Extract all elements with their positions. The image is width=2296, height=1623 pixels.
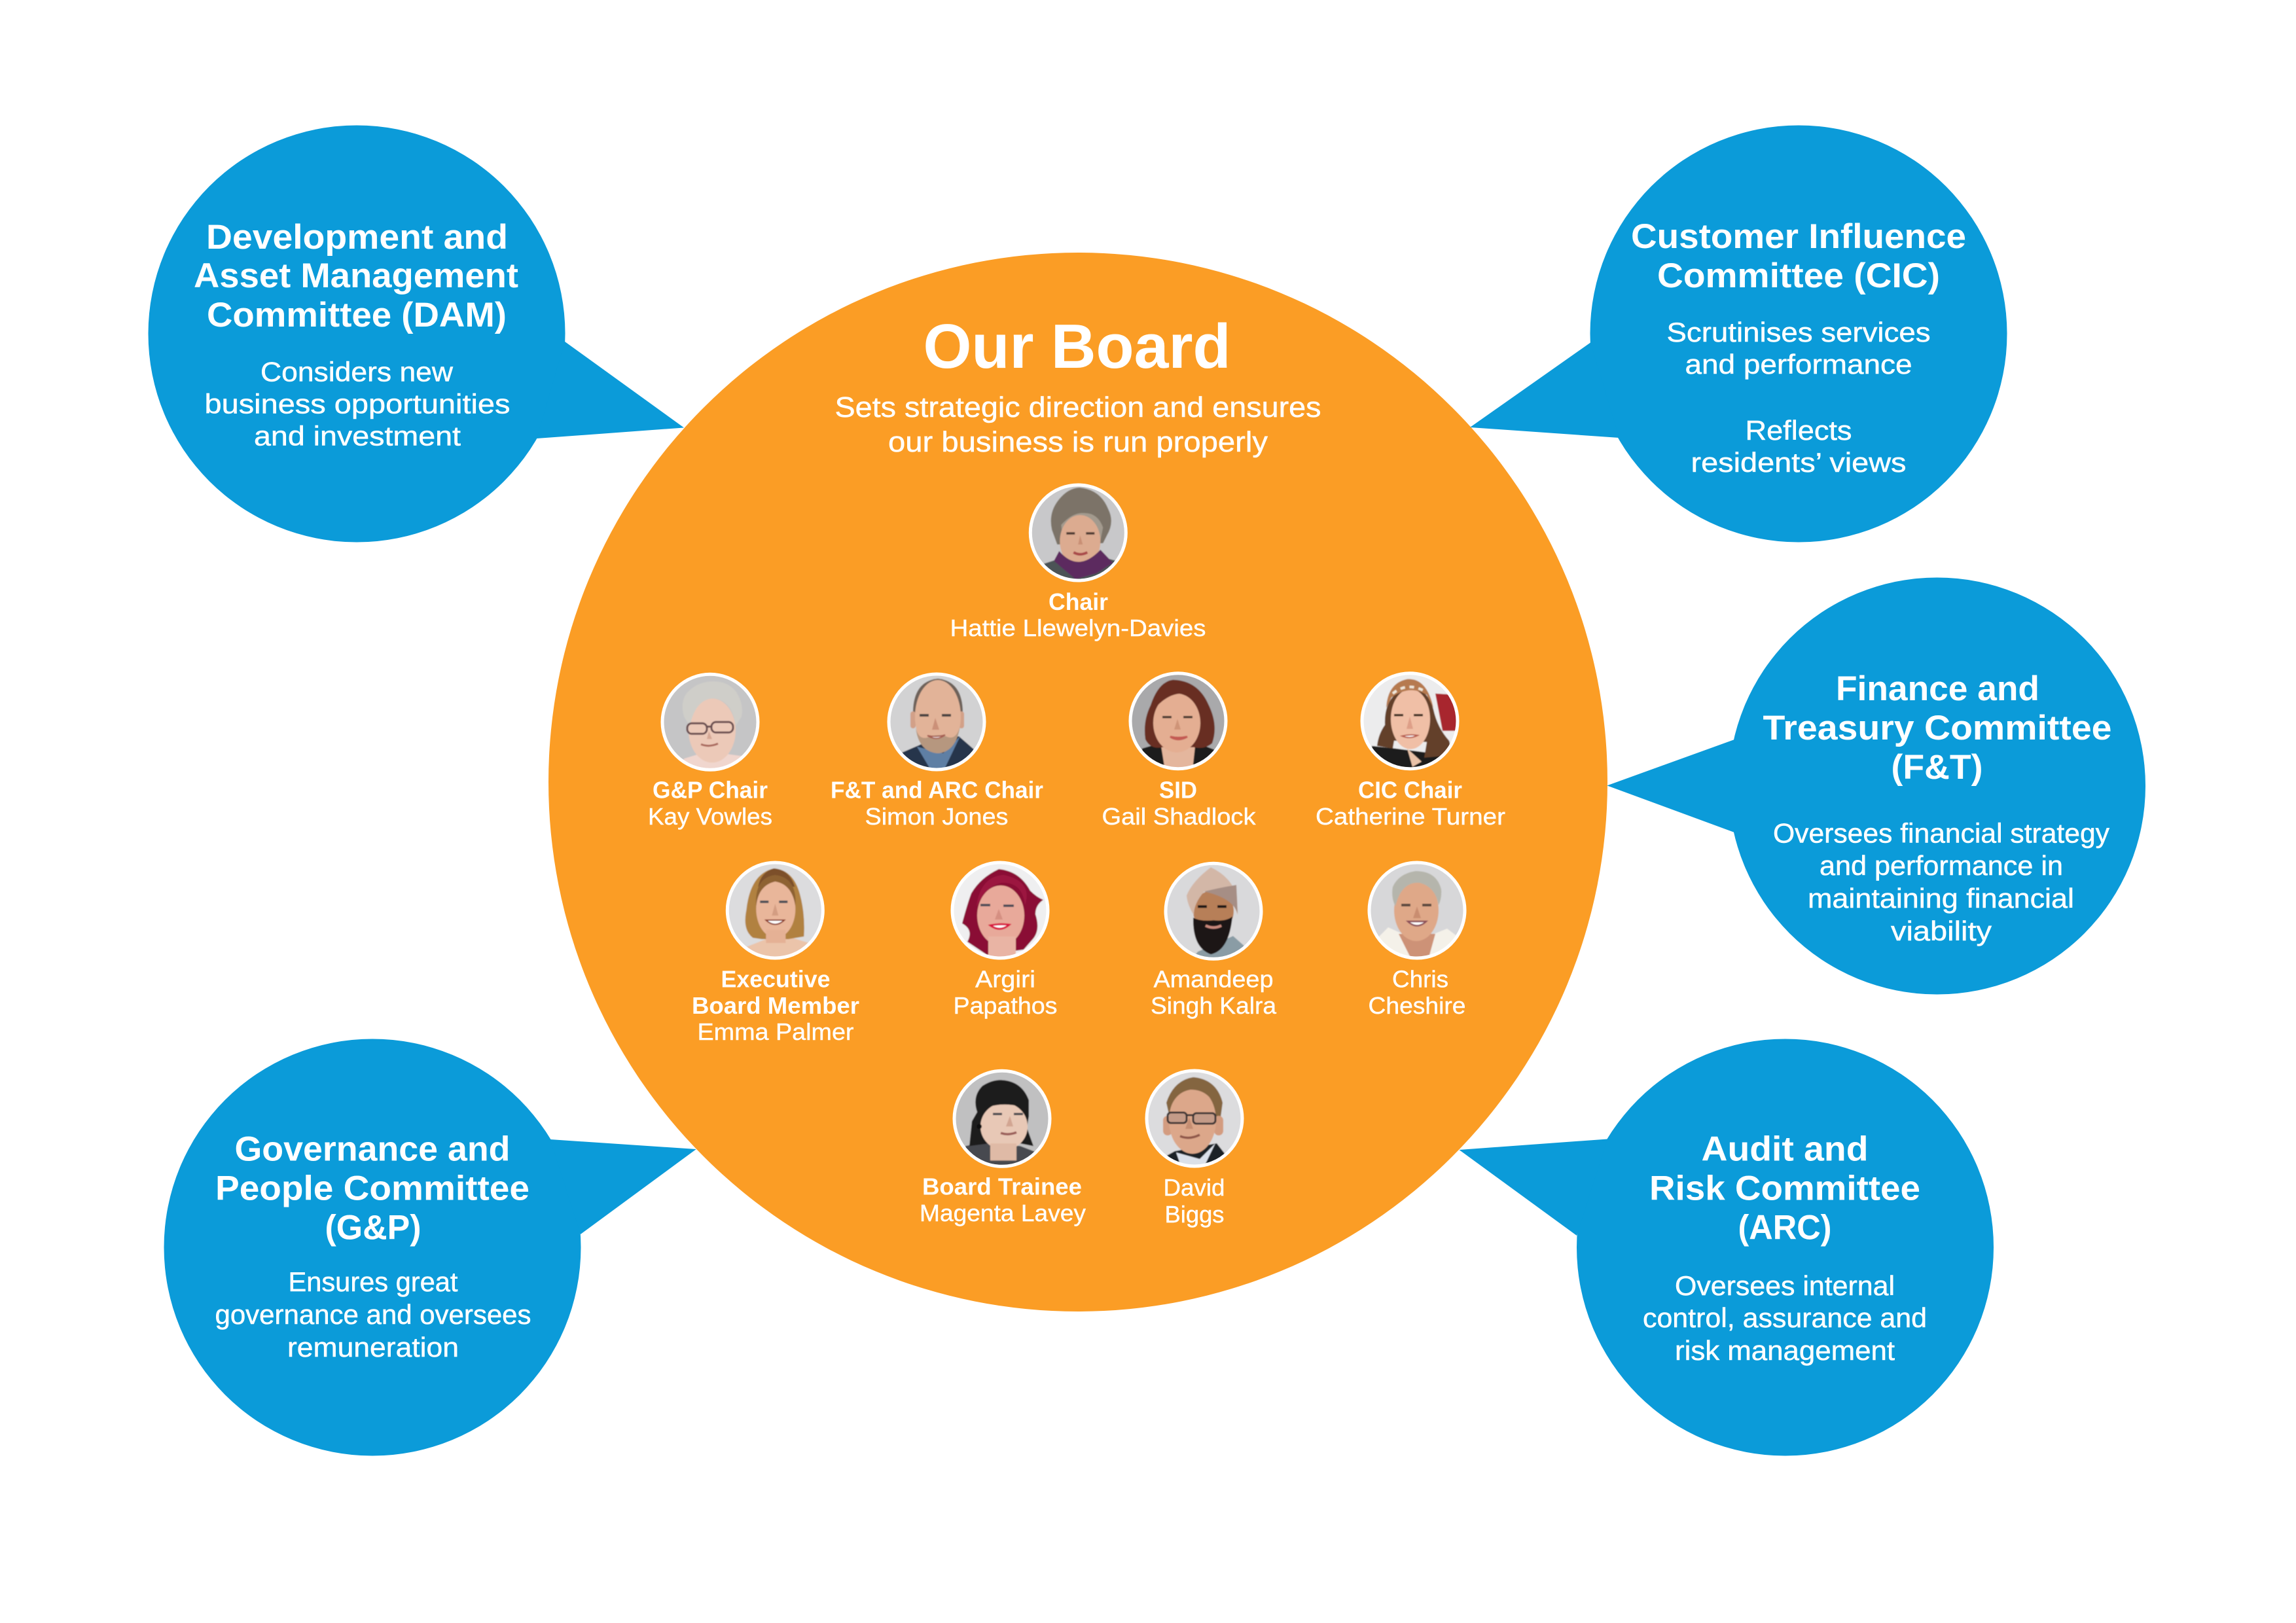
infographic canvas [148,126,2145,1455]
caption: Board Trainee: Board Trainee [922,1173,1082,1200]
heading: F&T [1763,669,2111,787]
caption: Executive Board Member [692,966,859,1045]
heading: ARC: Audit and [1702,1130,1868,1168]
heading: G&P [215,1130,529,1247]
heading: G&P: Governance and [234,1130,511,1168]
caption: SID [1102,776,1257,830]
caption: G&P Chair: Kay Vowles [648,803,772,830]
board member: Gail Shadlock [1102,672,1257,830]
heading: DAM: Development and [206,218,508,257]
board member: Magenta Lavey [920,1069,1086,1226]
speech bubble: F&T [1607,577,2145,995]
panel: central board circle [548,253,1607,1311]
heading: F&T: Treasury Committee [1763,709,2111,747]
heading: CIC [1631,217,1966,295]
text: DAM description: and investment [254,421,461,452]
text: G&P description: governance and oversees [215,1299,531,1330]
board member: Chris Cheshire [1368,861,1466,1019]
text: ARC description: Oversees internal [1675,1270,1895,1301]
heading: F&T: Finance and [1836,669,2039,708]
caption: Chair: Hattie Llewelyn-Davies [950,615,1206,641]
caption: Chris Cheshire [1368,966,1466,1019]
caption: CIC Chair [1316,776,1505,830]
caption: Executive Board Member: Emma Palmer [698,1018,854,1045]
caption: Chris Cheshire: Cheshire [1368,992,1466,1019]
heading: CIC: Customer Influence [1631,217,1966,256]
text: CIC description [1666,317,1931,478]
portrait: Chris Cheshire [1368,861,1466,959]
panel: Audit and Risk Committee [1460,1039,1994,1455]
text: F&T description: viability [1891,916,1992,946]
caption: CIC Chair: CIC Chair [1358,776,1462,804]
caption: Board Trainee [920,1173,1086,1226]
caption: Amandeep Singh Kalra: Singh Kalra [1151,992,1277,1019]
speech bubble: ARC [1460,1039,1994,1455]
text: DAM description [204,357,511,452]
text: DAM description: Considers new [260,357,454,387]
portrait: Gail Shadlock [1129,672,1227,770]
caption: CIC Chair: Catherine Turner [1316,803,1505,830]
caption: David Biggs [1164,1174,1225,1228]
caption: F&T and ARC Chair [831,776,1043,830]
caption: Chair: Chair [1049,588,1108,615]
text: CIC description: residents’ views [1691,447,1906,478]
caption: Executive Board Member: Executive [721,966,830,992]
text: DAM description: business opportunities [204,389,511,419]
caption: David Biggs: Biggs [1165,1201,1224,1228]
caption: Board Trainee: Magenta Lavey [920,1200,1086,1226]
board member: Simon Jones [831,673,1043,830]
caption: Amandeep Singh Kalra [1151,966,1277,1019]
text: G&P description: Ensures great [288,1266,458,1297]
heading: CIC: Committee (CIC) [1657,257,1940,295]
portrait: David Biggs [1145,1069,1244,1168]
caption: Chris Cheshire: Chris [1392,966,1448,992]
caption: Executive Board Member: Board Member [692,992,859,1019]
heading: DAM: Committee (DAM) [207,296,507,334]
panel: Governance and People Committee [164,1039,696,1455]
text: ARC description [1643,1270,1927,1366]
text: G&P description [215,1266,531,1363]
text: board description: our business is run properly [888,426,1268,458]
heading: G&P: People Committee [215,1169,529,1208]
heading: DAM: Asset Management [194,257,518,295]
text: F&T description: Oversees financial strategy [1773,818,2109,848]
text: board description [835,391,1321,458]
text: ARC description: risk management [1675,1335,1895,1366]
caption: G&P Chair [648,776,772,830]
board member: Catherine Turner [1316,672,1505,830]
text: CIC description: and performance [1685,349,1912,380]
heading: G&P: (G&P) [325,1208,422,1247]
portrait: Emma Palmer [726,861,824,959]
text: F&T description: and performance in [1820,850,2063,881]
portrait: Hattie Llewelyn-Davies [1029,484,1127,582]
text: board description: Sets strategic direction and ensures [835,391,1321,423]
heading: DAM [194,218,518,334]
board member: Hattie Llewelyn-Davies [950,484,1206,641]
heading: ARC: (ARC) [1738,1208,1831,1247]
text: ARC description: control, assurance and [1643,1302,1927,1333]
caption: Chair [950,588,1206,641]
speech bubble: DAM [148,126,684,542]
portrait: Catherine Turner [1361,672,1459,770]
heading: ARC: Risk Committee [1649,1169,1920,1208]
board member: Amandeep Singh Kalra [1151,862,1277,1019]
speech bubble: CIC [1470,126,2007,542]
caption: Argiri Papathos: Papathos [953,992,1058,1019]
panel: Development and Asset Management Committee [148,126,684,542]
text: F&T description [1773,818,2109,946]
caption: F&T and ARC Chair: Simon Jones [865,803,1008,830]
board member: David Biggs [1145,1069,1244,1228]
board member: Emma Palmer [692,861,859,1045]
caption: Argiri Papathos [953,966,1058,1019]
caption: SID: SID [1159,776,1197,804]
speech bubble: G&P [164,1039,696,1455]
portrait: Magenta Lavey [953,1069,1051,1168]
caption: David Biggs: David [1164,1174,1225,1201]
board member: Kay Vowles [648,673,772,830]
heading: ARC [1649,1130,1920,1247]
text: G&P description: remuneration [287,1332,459,1363]
caption: G&P Chair: G&P Chair [653,776,768,804]
title: Our Board [923,312,1230,382]
caption: SID: Gail Shadlock [1102,803,1257,830]
panel: Finance and Treasury Committee [1607,577,2145,995]
portrait: Simon Jones [888,673,986,771]
text: CIC description: Scrutinises services [1666,317,1931,348]
portrait: Argiri Papathos [951,861,1049,959]
caption: Amandeep Singh Kalra: Amandeep [1153,966,1274,992]
portrait: Kay Vowles [661,673,759,771]
text: F&T description: maintaining financial [1808,883,2074,914]
board member: Argiri Papathos [951,861,1058,1019]
caption: F&T and ARC Chair: F&T and ARC Chair [831,776,1043,804]
heading: F&T: (F&T) [1892,748,1983,787]
panel: Customer Influence Committee [1470,126,2007,542]
caption: Argiri Papathos: Argiri [975,966,1035,992]
portrait: Amandeep Singh Kalra [1164,862,1263,960]
text: CIC description: Reflects [1745,415,1852,446]
